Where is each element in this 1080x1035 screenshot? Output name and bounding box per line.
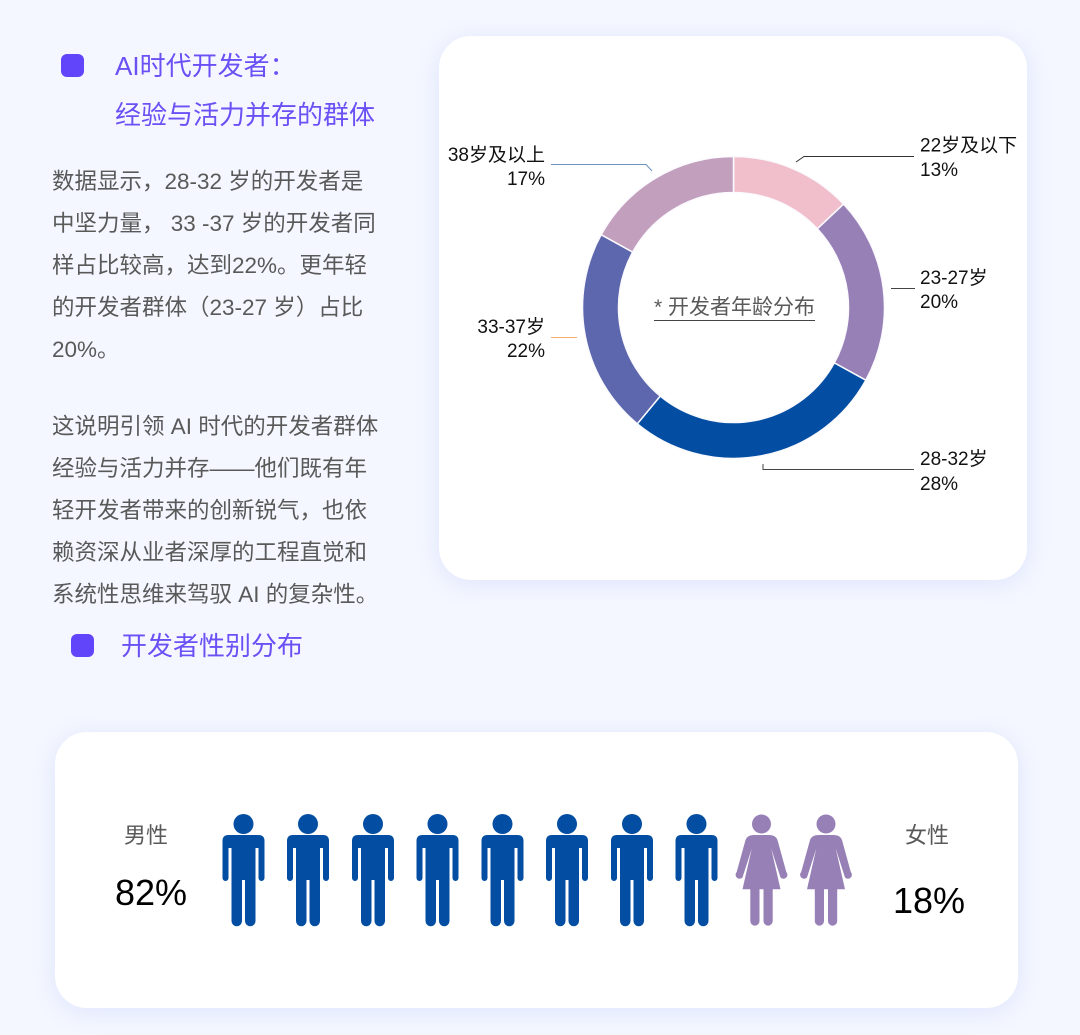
label: 33-37: 22% <box>507 341 545 362</box>
heading text: AI时代开发者： <box>115 51 296 81</box>
label: 23-27: 23-27岁 <box>920 267 988 289</box>
text block: experience paragraph: 系统性思维来驾驭 AI 的复杂性。 <box>52 582 378 607</box>
heading text: 经验与活力并存的群体 <box>115 100 375 130</box>
segment: 33-37 <box>583 235 660 424</box>
pictogram: 8 men and 2 women <box>222 814 852 926</box>
donut segments <box>583 156 884 458</box>
text block: age paragraph <box>52 169 376 362</box>
heading text: 开发者性别分布 <box>121 631 303 661</box>
text block: age paragraph: 中坚力量， 33 -37 岁的开发者同 <box>52 211 376 236</box>
bullet square <box>71 634 94 657</box>
label: 22 and under: 13% <box>920 160 958 181</box>
label: 28-32: 28-32岁 <box>920 448 988 470</box>
text block: age paragraph: 样占比较高，达到22%。更年轻 <box>52 253 367 278</box>
male label <box>115 823 187 913</box>
section heading: gender distribution <box>71 631 303 661</box>
female label <box>893 823 965 921</box>
label: 28-32 <box>763 448 988 495</box>
label: 22 and under <box>796 134 1017 181</box>
label: 23-27 <box>891 267 988 313</box>
label: 33-37: 33-37岁 <box>477 316 545 338</box>
text block: experience paragraph <box>52 414 378 607</box>
label: 23-27: 20% <box>920 292 958 313</box>
panel: age donut chart <box>439 36 1027 580</box>
label: 38 and over: 38岁及以上 <box>448 144 545 166</box>
heading text <box>115 51 375 130</box>
female percent: 18% <box>893 880 965 921</box>
text block: experience paragraph: 这说明引领 AI 时代的开发者群体 <box>52 414 378 439</box>
text block: experience paragraph: 经验与活力并存——他们既有年 <box>52 456 367 481</box>
label: 38 and over: 17% <box>507 169 545 190</box>
male percent: 82% <box>115 872 187 913</box>
text block: age paragraph: 数据显示，28-32 岁的开发者是 <box>52 169 363 194</box>
label: 22 and under: 22岁及以下 <box>920 134 1017 156</box>
text block: experience paragraph: 赖资深从业者深厚的工程直觉和 <box>52 540 367 565</box>
segment: 23-27 <box>817 204 884 380</box>
text block: age paragraph: 20%。 <box>52 337 120 362</box>
bullet square <box>61 54 84 77</box>
segment: 38 and over <box>601 156 734 252</box>
center caption: * 开发者年龄分布 <box>654 296 815 319</box>
segment: 28-32 <box>637 363 866 458</box>
segment: 22 and under <box>734 156 844 229</box>
female figures <box>736 814 852 926</box>
donut chart: developer age distribution <box>448 134 1017 495</box>
label: 33-37 <box>477 316 577 362</box>
male figures <box>222 814 718 926</box>
panel: gender distribution <box>55 732 1018 1008</box>
male title: 男性 <box>124 823 168 848</box>
text block: age paragraph: 的开发者群体（23-27 岁）占比 <box>52 295 363 320</box>
label: 28-32: 28% <box>920 474 958 495</box>
section heading: developers in the AI era <box>61 51 375 130</box>
female title: 女性 <box>905 823 949 848</box>
label: 38 and over <box>448 144 652 190</box>
text block: experience paragraph: 轻开发者带来的创新锐气，也依 <box>52 498 367 523</box>
